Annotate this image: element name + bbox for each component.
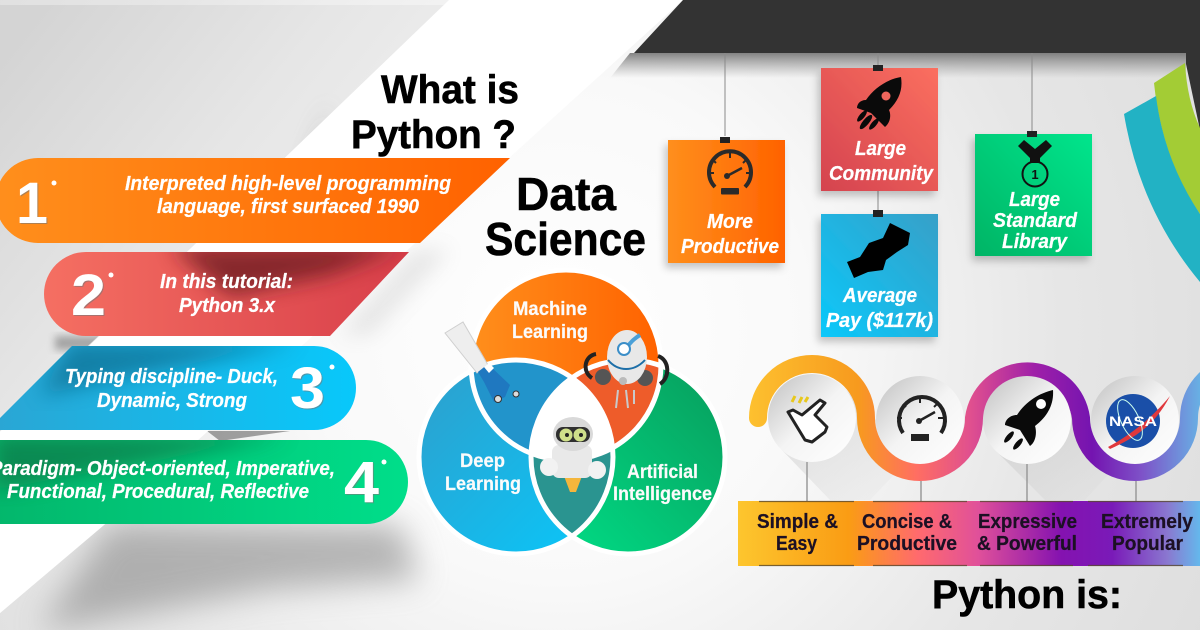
- label: extremely popular: Popular: [1112, 533, 1183, 555]
- dark header bar: [634, 0, 1200, 130]
- strip edge lines: [759, 502, 1183, 566]
- icon: medal: 1: [1031, 167, 1039, 182]
- teal arc: [1124, 96, 1200, 282]
- venn diagram: [419, 270, 725, 554]
- title: What is Python: Python ?: [351, 113, 516, 157]
- card: Average Pay: Pay ($117k): [826, 310, 933, 332]
- heading: Data Science: Data: [516, 168, 616, 220]
- label: artificial intelligence: Intelligence: [613, 484, 712, 505]
- clip: [1027, 131, 1037, 137]
- label: deep learning: [445, 451, 521, 495]
- card: Large Standard Library: Library: [1002, 231, 1068, 253]
- heading: Python is: Python is:: [932, 573, 1122, 617]
- green arc: [1154, 63, 1200, 214]
- card: Large Community: Community: [829, 163, 934, 185]
- icon: gauge: [709, 151, 751, 194]
- bar 2: tutorial: In this tutorial:: [160, 271, 293, 293]
- label: artificial intelligence: [613, 462, 712, 505]
- title: What is Python: [351, 68, 519, 157]
- card: Average Pay: [821, 210, 938, 337]
- icon: pointer hand: [788, 396, 827, 442]
- background: white diagonal band: [0, 0, 683, 630]
- label: machine learning: [512, 299, 588, 343]
- clip: [873, 210, 883, 217]
- card: More Productive: Productive: [681, 236, 779, 258]
- icon: rocket: [1003, 390, 1053, 451]
- connector lines: [807, 462, 1136, 501]
- icon: rocket: [856, 77, 902, 131]
- label: machine learning: Machine: [513, 299, 587, 320]
- bar 2: tutorial: [44, 246, 409, 336]
- circle: machine learning: [471, 270, 661, 460]
- label: concise and productive: Concise &: [862, 511, 952, 533]
- bar 1: interpreted language: language, first surfaced 1990: [157, 196, 419, 218]
- wave ribbon: [758, 364, 1200, 472]
- card: Large Community: Large: [855, 138, 906, 160]
- venn outlines: [419, 270, 725, 554]
- card: Large Standard Library: Large: [1009, 189, 1060, 211]
- card: Large Standard Library: Standard: [993, 210, 1078, 232]
- bar 1: interpreted language: [0, 158, 510, 243]
- clip: [873, 65, 883, 71]
- disc long shadows: [781, 387, 1125, 500]
- heading: Data Science: Science: [485, 213, 646, 265]
- overlap: orange and green: [576, 364, 658, 444]
- clip: [720, 137, 730, 143]
- icon: robot arm: [445, 322, 519, 402]
- label: machine learning: Learning: [512, 322, 588, 343]
- bar 3: typing discipline: Typing discipline- Duck,: [65, 366, 278, 388]
- icon: pay map blob: [847, 223, 910, 278]
- bar 3: typing discipline: Dynamic, Strong: [97, 390, 247, 412]
- title: What is Python: What is: [381, 68, 519, 112]
- bar 4: paradigm: Functional, Procedural, Reflective: [7, 481, 309, 503]
- label: simple and easy: Easy: [776, 533, 818, 555]
- python is: timeline: [738, 364, 1200, 566]
- bar 4: paradigm: [0, 436, 408, 524]
- circle: artificial intelligence: [531, 360, 725, 554]
- hanging strings: [725, 53, 1032, 210]
- bar 3: typing discipline: 3: [290, 356, 325, 421]
- label: concise and productive: Productive: [857, 533, 957, 555]
- heading: Data Science: [485, 168, 646, 265]
- card: Large Standard Library: [975, 131, 1092, 256]
- icon: jet robot: [540, 417, 606, 492]
- card: More Productive: [668, 137, 785, 263]
- label: extremely popular: Extremely: [1101, 511, 1194, 533]
- bar 4: paradigm: Paradigm- Object-oriented, Imperative,: [0, 458, 335, 480]
- label: concise and productive: [857, 511, 957, 555]
- background: grey upper-left panel: [0, 5, 436, 354]
- bar 4: paradigm: 4: [344, 450, 379, 515]
- label: simple and easy: Simple &: [757, 511, 838, 533]
- icon: NASA logo: [1106, 394, 1170, 449]
- label: expressive and powerful: Expressive: [978, 511, 1077, 533]
- color strip: [738, 501, 1200, 566]
- bar 2: tutorial: 2: [71, 263, 106, 328]
- icon: gauge: [897, 397, 945, 441]
- circle: deep learning: [419, 360, 613, 554]
- bar 3: typing discipline: [0, 342, 356, 430]
- card: Large Community: [821, 65, 938, 191]
- label: deep learning: Deep: [460, 451, 505, 472]
- label: artificial intelligence: Artificial: [627, 462, 698, 483]
- icon: NASA logo: NASA: [1109, 414, 1157, 429]
- overlap: orange and blue: [474, 362, 568, 450]
- bar 1: interpreted language: Interpreted high-level programming: [125, 173, 451, 195]
- label: expressive and powerful: & Powerful: [977, 533, 1077, 555]
- overlap: blue and green: [534, 452, 610, 533]
- icon: egg robot: [586, 330, 667, 408]
- label: extremely popular: [1101, 511, 1194, 555]
- card: More Productive: More: [707, 211, 753, 233]
- label: expressive and powerful: [977, 511, 1077, 555]
- corner arcs: [1124, 63, 1200, 282]
- center overlap: [534, 381, 610, 456]
- bar 2: tutorial: Python 3.x: [179, 295, 276, 317]
- bar 1: interpreted language: 1: [16, 171, 48, 236]
- discs: [768, 374, 1179, 464]
- label: simple and easy: [757, 511, 838, 555]
- card: Average Pay: Average: [842, 285, 917, 307]
- label: deep learning: Learning: [445, 474, 521, 495]
